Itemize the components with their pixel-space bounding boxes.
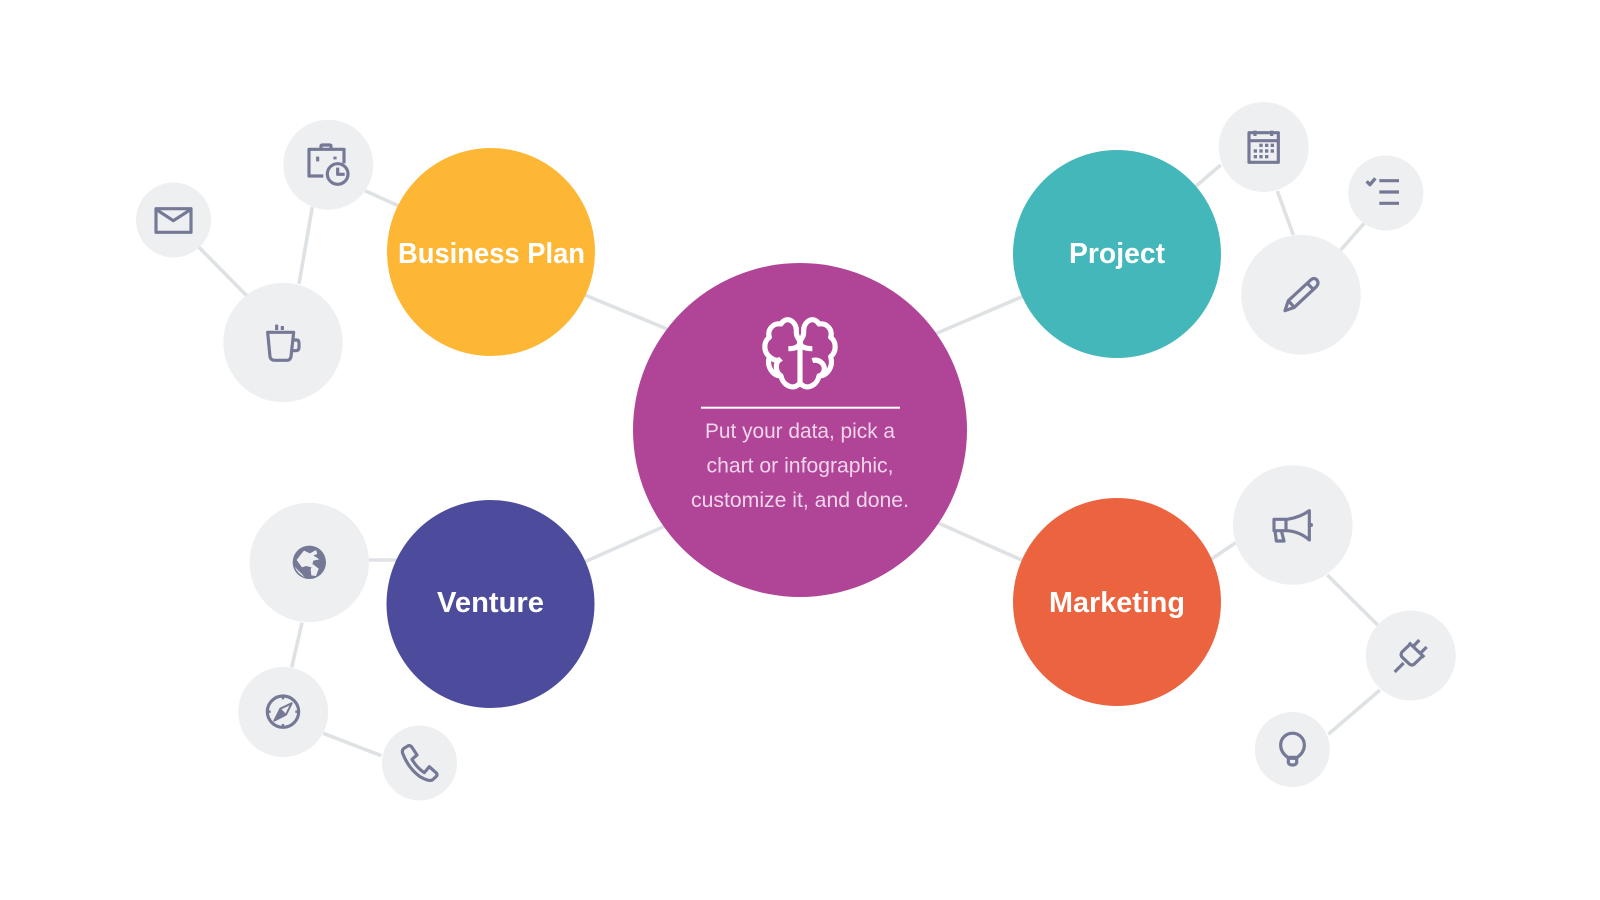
node: Project bbox=[1013, 150, 1221, 358]
icon node: light bulb bbox=[1255, 712, 1330, 787]
node: Venture: Venture bbox=[437, 587, 544, 619]
icon node: compass bbox=[238, 667, 328, 757]
icon node: pencil bbox=[1241, 235, 1361, 355]
node: Marketing bbox=[1013, 498, 1221, 706]
icon node: calendar bbox=[1219, 102, 1309, 192]
icon node: briefcase with clock bbox=[283, 120, 373, 210]
icon node: phone bbox=[382, 726, 457, 800]
central text: chart or infographic, bbox=[706, 454, 894, 478]
node: Marketing: Marketing bbox=[1049, 587, 1185, 619]
node: Business Plan: Business Plan bbox=[398, 238, 585, 270]
icon node: coffee cup bbox=[223, 283, 343, 402]
icon: brain bbox=[765, 320, 835, 387]
node: Venture bbox=[386, 500, 594, 708]
central text: Put your data, pick a bbox=[705, 419, 895, 443]
central text: customize it, and done. bbox=[691, 488, 909, 512]
icon node: plug bbox=[1366, 610, 1456, 700]
icon node: checklist bbox=[1348, 156, 1423, 230]
icon node: envelope bbox=[136, 182, 211, 258]
central node bbox=[633, 263, 967, 597]
node: Business Plan bbox=[387, 148, 595, 356]
divider bbox=[701, 407, 900, 409]
central text bbox=[691, 419, 909, 512]
icon node: globe bbox=[250, 503, 369, 622]
icon node: megaphone bbox=[1233, 465, 1353, 585]
node: Project: Project bbox=[1069, 238, 1165, 270]
connector lines bbox=[198, 165, 1380, 756]
